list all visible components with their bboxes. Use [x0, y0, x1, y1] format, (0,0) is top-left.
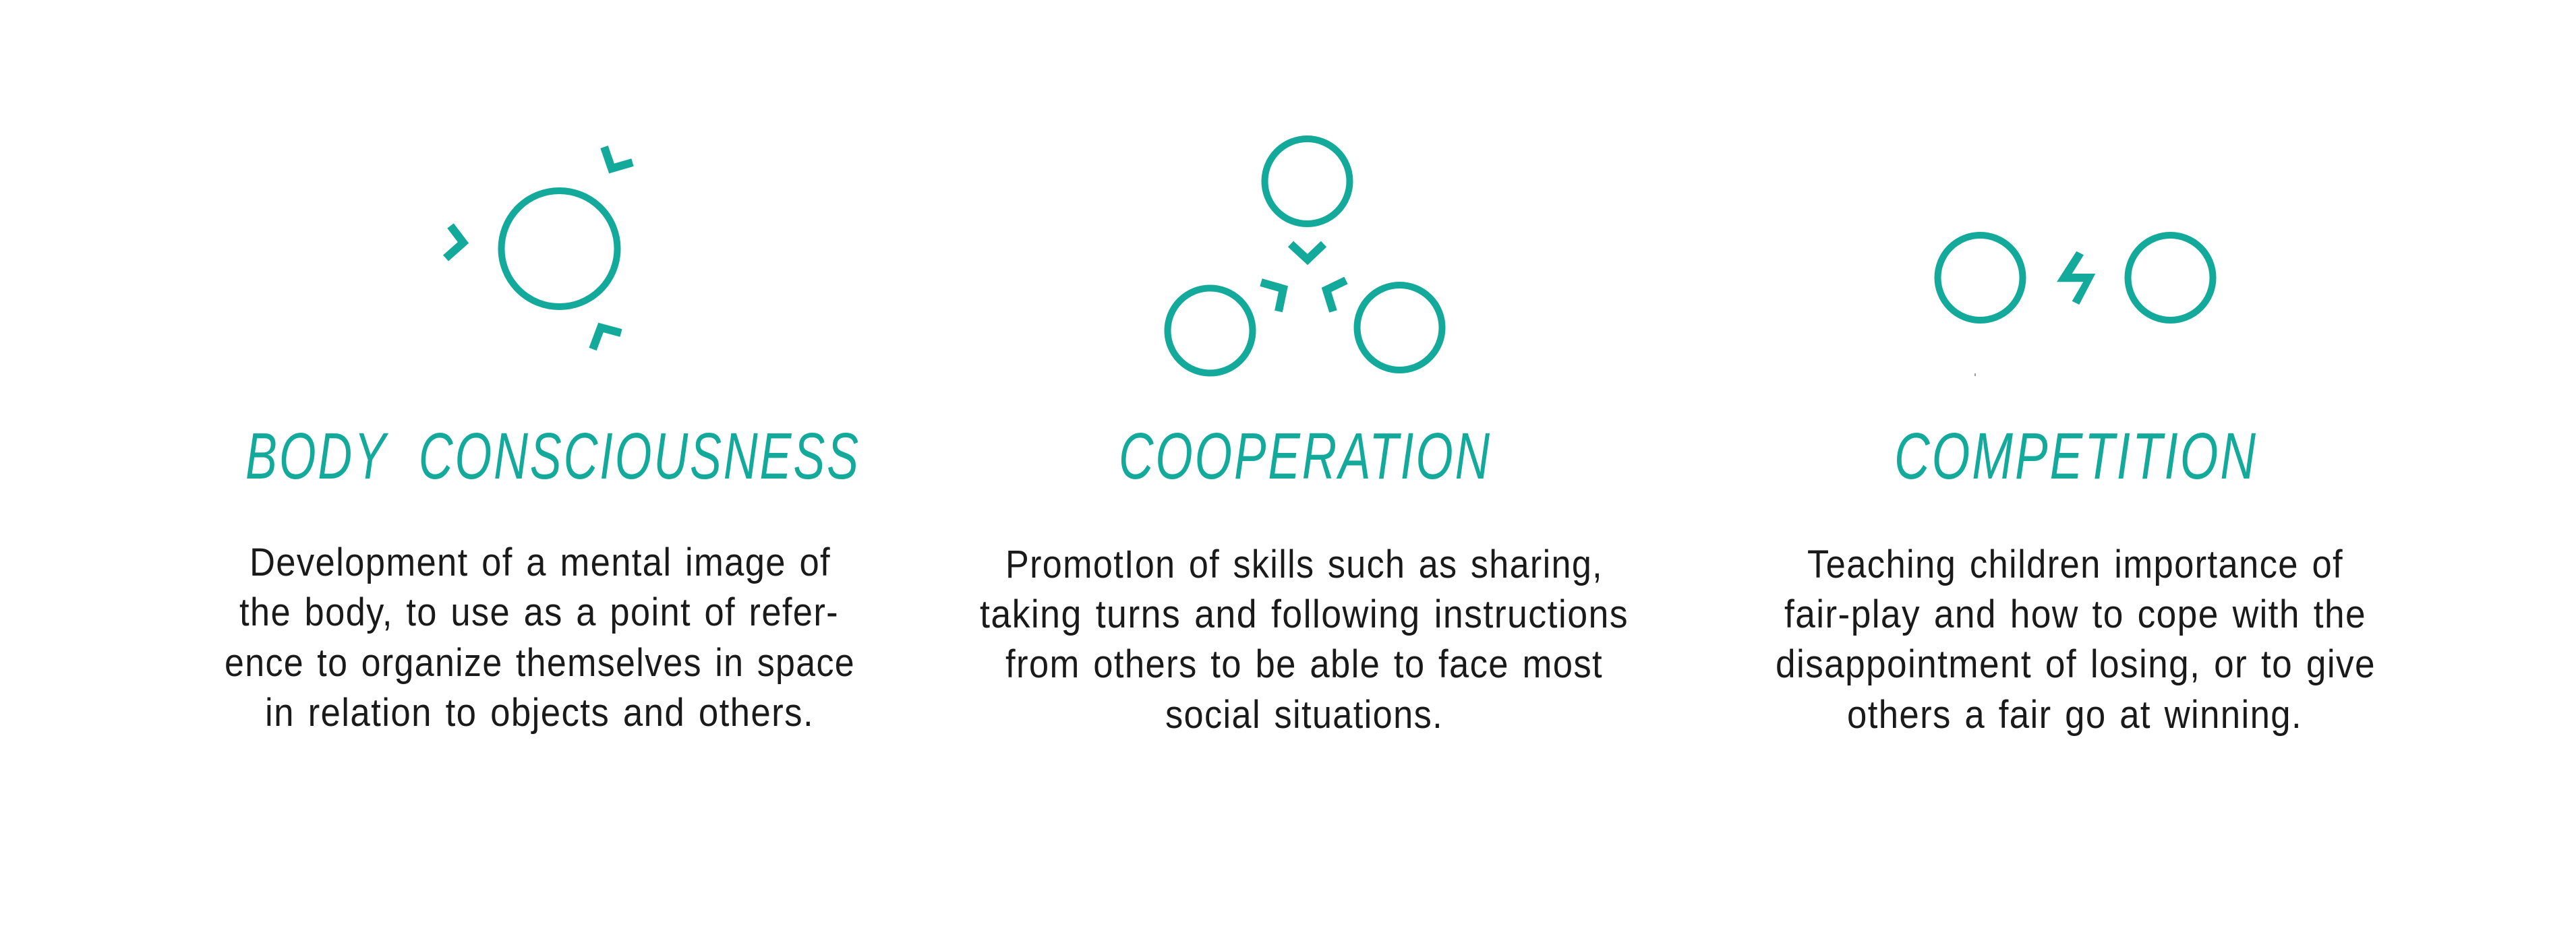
text block: cooperation description: taking turns and following instructions — [980, 592, 1629, 636]
panel: body consciousness — [225, 147, 860, 735]
heading: cooperation: COOPERATION — [1119, 419, 1492, 493]
text block: competition description: disappointment of losing, or to give — [1776, 642, 2376, 686]
icon: circle with three chevrons — [446, 147, 633, 349]
text block: body consciousness description: Development of a mental image of — [250, 541, 831, 584]
heading: competition: COMPETITION — [1894, 419, 2258, 493]
panel: cooperation — [980, 139, 1629, 737]
text block: body consciousness description: ence to organize themselves in space — [225, 641, 855, 685]
text block: competition description: Teaching children importance of — [1807, 543, 2343, 586]
panel: competition — [1776, 235, 2376, 737]
icon: three circles with chevrons — [1168, 139, 1442, 373]
icon: two circles with lightning bolt — [1938, 235, 2213, 376]
text block: body consciousness description: in relation to objects and others. — [265, 691, 814, 735]
text block: competition description — [1776, 543, 2376, 737]
text block: competition description: others a fair go at winning. — [1847, 693, 2302, 737]
text block: cooperation description: social situations. — [1165, 693, 1443, 737]
text block: cooperation description — [980, 543, 1629, 737]
text block: body consciousness description — [225, 541, 855, 735]
text block: competition description: fair-play and how to cope with the — [1784, 592, 2366, 636]
text block: cooperation description: PromotIon of skills such as sharing, — [1005, 543, 1603, 586]
heading: body consciousness: BODY CONSCIOUSNESS — [245, 419, 860, 493]
text block: body consciousness description: the body, to use as a point of refer- — [239, 590, 839, 634]
text block: cooperation description: from others to be able to face most — [1005, 642, 1603, 686]
